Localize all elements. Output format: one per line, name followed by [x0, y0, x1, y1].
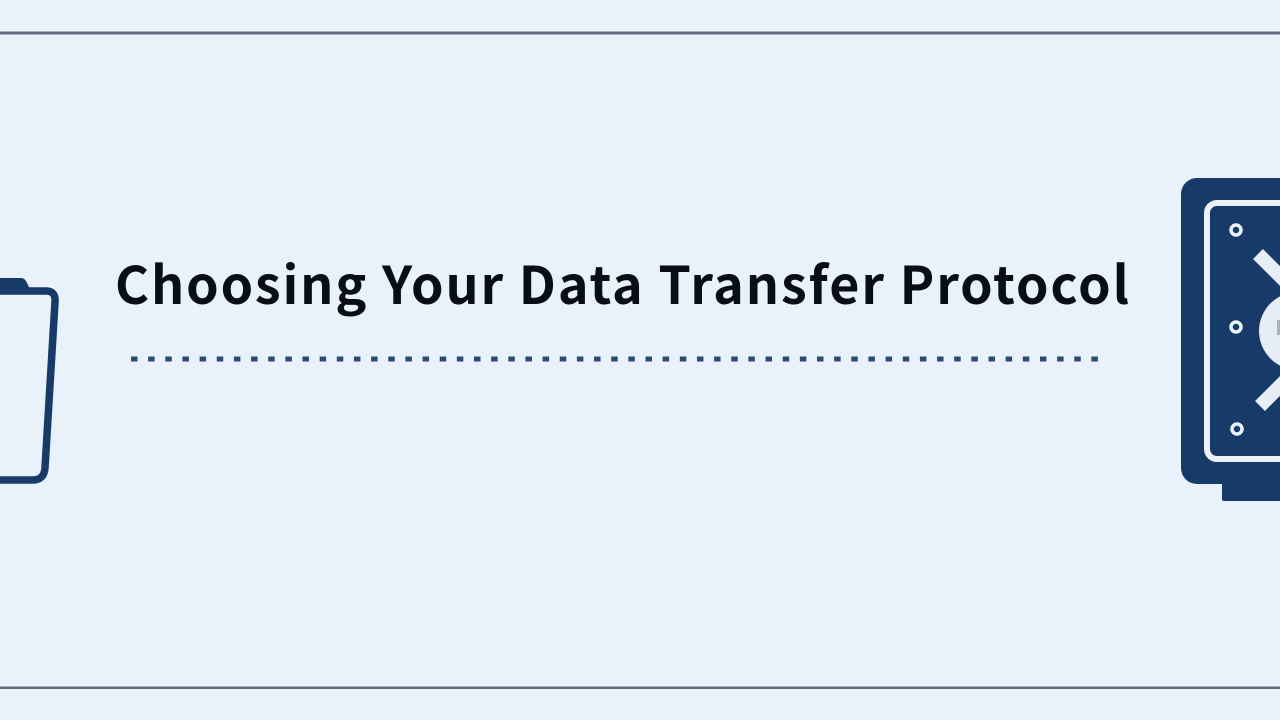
title: Choosing Your Data Transfer Protocol: [115, 244, 1129, 319]
icon: safe: [1181, 178, 1280, 501]
icon: folder: [0, 278, 55, 480]
dotted divider: [131, 356, 1098, 362]
